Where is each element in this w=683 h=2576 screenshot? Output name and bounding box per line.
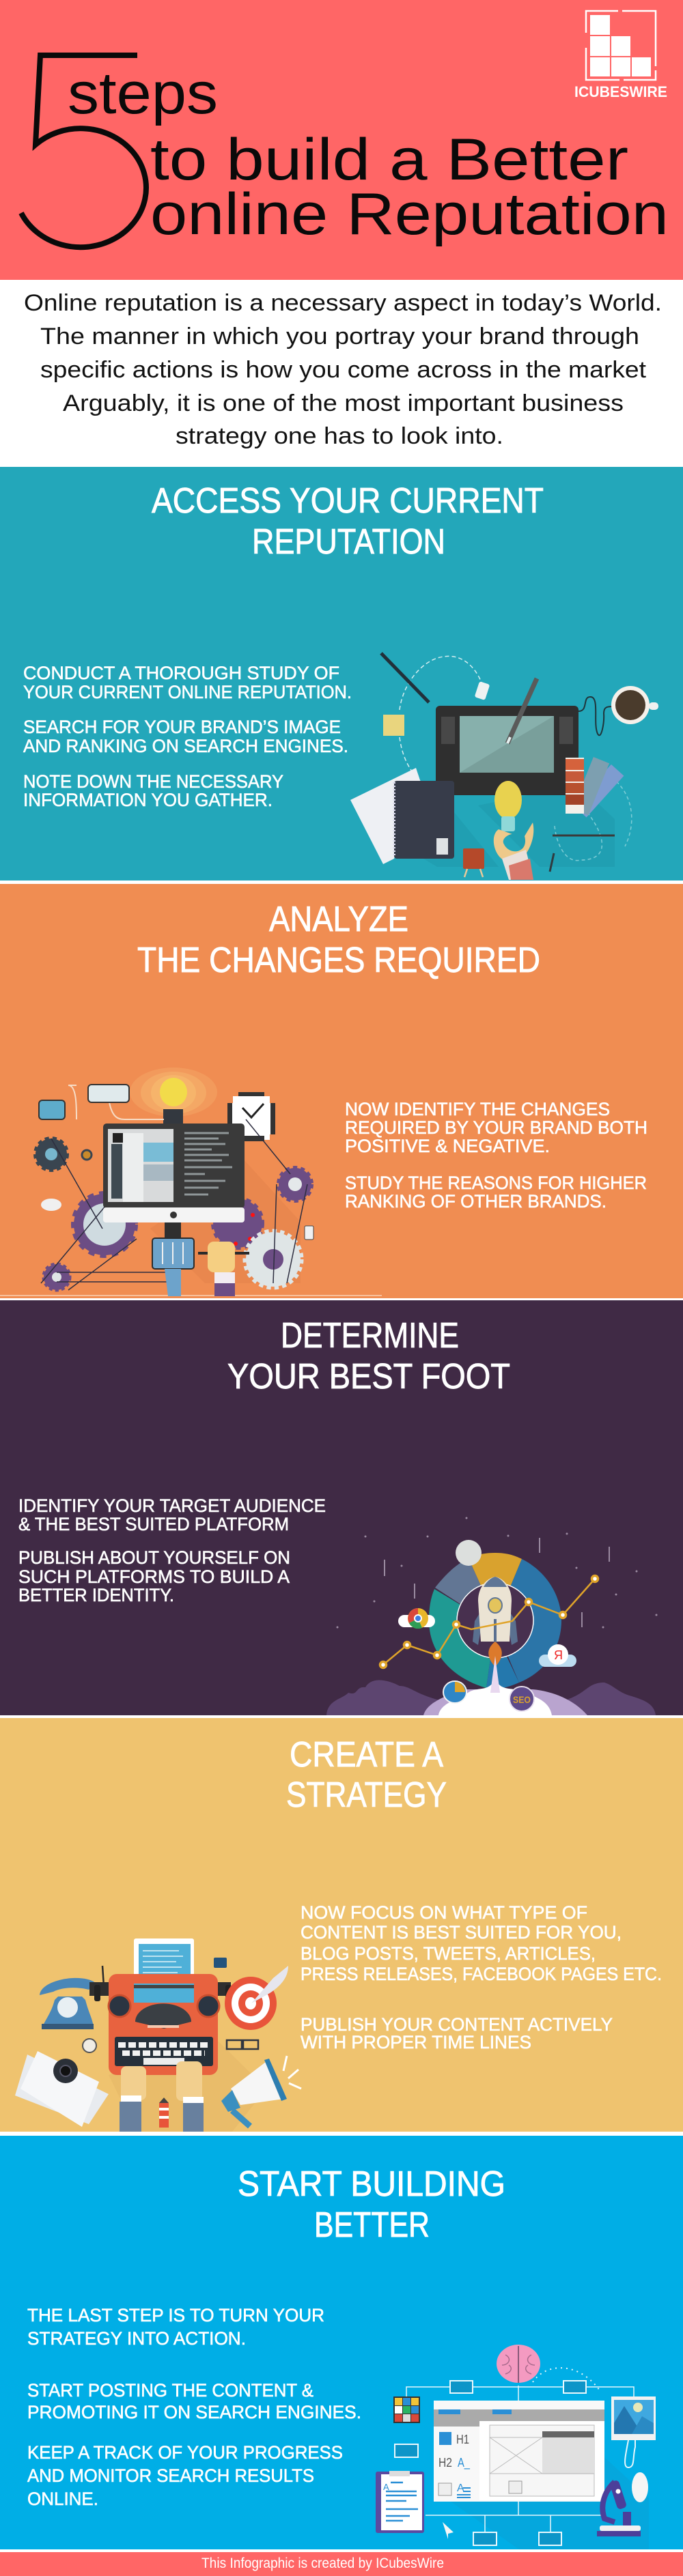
icon: gears: [36, 1139, 311, 1290]
text block: step 1: YOUR CURRENT ONLINE REPUTATION.: [23, 682, 352, 702]
heading: step 5: BETTER: [314, 2205, 430, 2245]
text block: step 3: SUCH PLATFORMS TO BUILD A: [18, 1566, 290, 1587]
text block: step 1: AND RANKING ON SEARCH ENGINES.: [23, 736, 348, 756]
icon: ICubesWire logo: [574, 11, 667, 100]
icon: dial panel: [39, 1100, 65, 1119]
icon: cloud: [41, 1199, 61, 1211]
icon: fountain pen: [381, 653, 429, 702]
icon: target with feather: [225, 1966, 288, 2030]
icon: clock: [227, 1092, 275, 1141]
chart: growth line: [380, 1575, 598, 1668]
illustration: typewriter desk: [15, 1938, 301, 2132]
text block: step 4: PUBLISH YOUR CONTENT ACTIVELY: [301, 2014, 613, 2035]
icon: big numeral 5: [21, 55, 146, 247]
heading: step 5: START BUILDING: [238, 2164, 505, 2204]
intro text block: strategy one has to look into.: [176, 423, 503, 449]
icon: rocket: [473, 1577, 518, 1667]
icon: moon: [456, 1540, 482, 1566]
browser wireframe window: A: [457, 2482, 464, 2494]
illustration: rocket launch: [326, 1517, 657, 1715]
intro text block: Online reputation is a necessary aspect in today’s World.: [24, 290, 662, 316]
text block: step 5: STRATEGY INTO ACTION.: [27, 2328, 246, 2349]
text block: step 3: [18, 1495, 326, 1605]
text block: step 3: & THE BEST SUITED PLATFORM: [18, 1514, 289, 1534]
text block: step 3: PUBLISH ABOUT YOURSELF ON: [18, 1547, 290, 1568]
heading: step 4: [286, 1735, 447, 1815]
icon: graphics tablet: [436, 678, 579, 795]
icon: briefcase: [214, 1958, 227, 1968]
illustration: design desk: [350, 653, 658, 880]
text block: step 2: [345, 1099, 647, 1212]
text block: step 5: AND MONITOR SEARCH RESULTS: [27, 2465, 314, 2486]
illustration: machine monitor: [0, 1068, 382, 1296]
heading: step 3: [227, 1316, 510, 1397]
icon: easel: [463, 848, 484, 869]
heading: step 1: ACCESS YOUR CURRENT: [152, 481, 544, 521]
title: steps: [68, 61, 218, 126]
text block: step 2: REQUIRED BY YOUR BRAND BOTH: [345, 1117, 647, 1138]
icon: SEO badge: SEO: [513, 1694, 531, 1705]
intro text block: The manner in which you portray your brand through: [40, 324, 639, 349]
icon: sticky note: [383, 715, 404, 736]
icon: typing hands: [120, 2061, 204, 2132]
heading: step 2: THE CHANGES REQUIRED: [137, 941, 540, 980]
clouds: [326, 1656, 656, 1715]
icon: paper and camera: [15, 2051, 109, 2127]
icon: colour swatches: [566, 757, 624, 818]
heading: step 3: DETERMINE: [281, 1316, 459, 1356]
icon: monitor: [103, 1124, 245, 1239]
text block: step 3: IDENTIFY YOUR TARGET AUDIENCE: [18, 1495, 326, 1516]
icon: typewriter: [89, 1974, 232, 2075]
icon: gauge: [83, 2039, 96, 2052]
text block: step 4: BLOG POSTS, TWEETS, ARTICLES,: [301, 1943, 596, 1964]
icon: lighthouse: [159, 2098, 169, 2128]
icon: cursor: [443, 2522, 454, 2539]
icon: hand on lever: [198, 1242, 249, 1296]
text block: step 2: RANKING OF OTHER BRANDS.: [345, 1191, 607, 1212]
panel: step 2 analyze the changes required: [0, 884, 683, 1298]
intro text block: Arguably, it is one of the most important business: [63, 390, 624, 416]
icon: sketch paper: [350, 768, 420, 864]
icon: yandex cloud: [539, 1644, 576, 1667]
icon: clock circle: [443, 1681, 466, 1703]
title: to build a Better: [150, 127, 628, 192]
icon: rotary telephone: [40, 1978, 96, 2029]
title: online Reputation: [150, 182, 669, 247]
browser wireframe window: [434, 2401, 604, 2502]
panel: step 4 create a strategy: [0, 1718, 683, 2132]
icon: megaphone: [221, 2056, 301, 2126]
panel: step 1 access your current reputation: [0, 467, 683, 881]
icon: clipboard: A: [383, 2482, 389, 2492]
heading: step 2: [137, 900, 540, 980]
title: [68, 61, 669, 247]
text block: step 4: NOW FOCUS ON WHAT TYPE OF: [301, 1902, 587, 1923]
icon: glasses: [227, 2040, 258, 2049]
text block: step 1: SEARCH FOR YOUR BRAND’S IMAGE: [23, 717, 341, 737]
text block: step 5: PROMOTING IT ON SEARCH ENGINES.: [27, 2402, 361, 2422]
heading: step 2: ANALYZE: [269, 900, 408, 939]
icon: clipboard: [376, 2471, 424, 2533]
text block: step 1: [23, 663, 352, 810]
icon: mouse: [632, 2472, 648, 2502]
icon: landscape photo: [611, 2396, 656, 2440]
footer bar: This Infographic is created by ICubesWire: [201, 2556, 444, 2571]
icon: microscope: [597, 2480, 641, 2536]
panel: header: [0, 0, 683, 280]
icon: chart panel: [88, 1085, 129, 1102]
heading: step 5: [238, 2164, 505, 2245]
icon: slider panel: [152, 1238, 194, 1296]
browser wireframe window: H1: [456, 2433, 469, 2446]
text block: step 4: [301, 1902, 662, 2052]
icon: notebook: [394, 781, 454, 859]
panel: step 3 determine your best foot: [0, 1300, 683, 1715]
icon: rubik cube: [393, 2396, 420, 2423]
intro text block: specific actions is how you come across in the market: [40, 357, 647, 383]
text block: step 5: [27, 2305, 361, 2509]
heading: step 1: REPUTATION: [252, 522, 445, 562]
panel: step 5 start building better: [0, 2136, 683, 2549]
heading: step 4: CREATE A: [290, 1735, 443, 1775]
browser wireframe window: A_: [458, 2456, 471, 2470]
text block: step 5: START POSTING THE CONTENT &: [27, 2380, 313, 2401]
text block: step 4: PRESS RELEASES, FACEBOOK PAGES ETC.: [301, 1964, 662, 1984]
icon: chrome cloud: [398, 1608, 435, 1629]
icon: lightbulb in hand: [494, 781, 533, 880]
text block: step 1: NOTE DOWN THE NECESSARY: [23, 771, 283, 792]
text block: step 2: POSITIVE & NEGATIVE.: [345, 1136, 550, 1156]
text block: step 2: STUDY THE REASONS FOR HIGHER: [345, 1173, 647, 1193]
icon: tablet on typewriter: [134, 1938, 194, 2000]
icon: SEO badge: [510, 1687, 534, 1711]
icon: brain: [497, 2345, 540, 2383]
icon: yandex cloud: Я: [554, 1648, 563, 1662]
text block: step 4: CONTENT IS BEST SUITED FOR YOU,: [301, 1922, 622, 1943]
text block: step 5: THE LAST STEP IS TO TURN YOUR: [27, 2305, 324, 2325]
browser wireframe window: H2: [438, 2456, 452, 2470]
connector boxes: [395, 2381, 586, 2545]
text block: step 5: ONLINE.: [27, 2489, 98, 2509]
text block: step 1: INFORMATION YOU GATHER.: [23, 790, 273, 810]
footer bar: [0, 2552, 683, 2576]
text block: step 1: CONDUCT A THOROUGH STUDY OF: [23, 663, 339, 683]
heading: step 3: YOUR BEST FOOT: [227, 1357, 510, 1397]
text block: step 5: KEEP A TRACK OF YOUR PROGRESS: [27, 2442, 343, 2463]
intro text block: [24, 290, 662, 449]
icon: ICubesWire logo: ICUBESWIRE: [574, 83, 667, 100]
heading: step 1: [152, 481, 544, 562]
icon: glowing lightbulb: [130, 1068, 217, 1124]
text block: step 4: WITH PROPER TIME LINES: [301, 2032, 531, 2052]
heading: step 4: STRATEGY: [286, 1775, 447, 1815]
illustration: web wireframe: [376, 2345, 656, 2549]
icon: coffee cup: [611, 686, 658, 724]
text block: step 3: BETTER IDENTITY.: [18, 1585, 174, 1605]
chart: donut ring: [429, 1553, 561, 1689]
text block: step 2: NOW IDENTIFY THE CHANGES: [345, 1099, 610, 1119]
